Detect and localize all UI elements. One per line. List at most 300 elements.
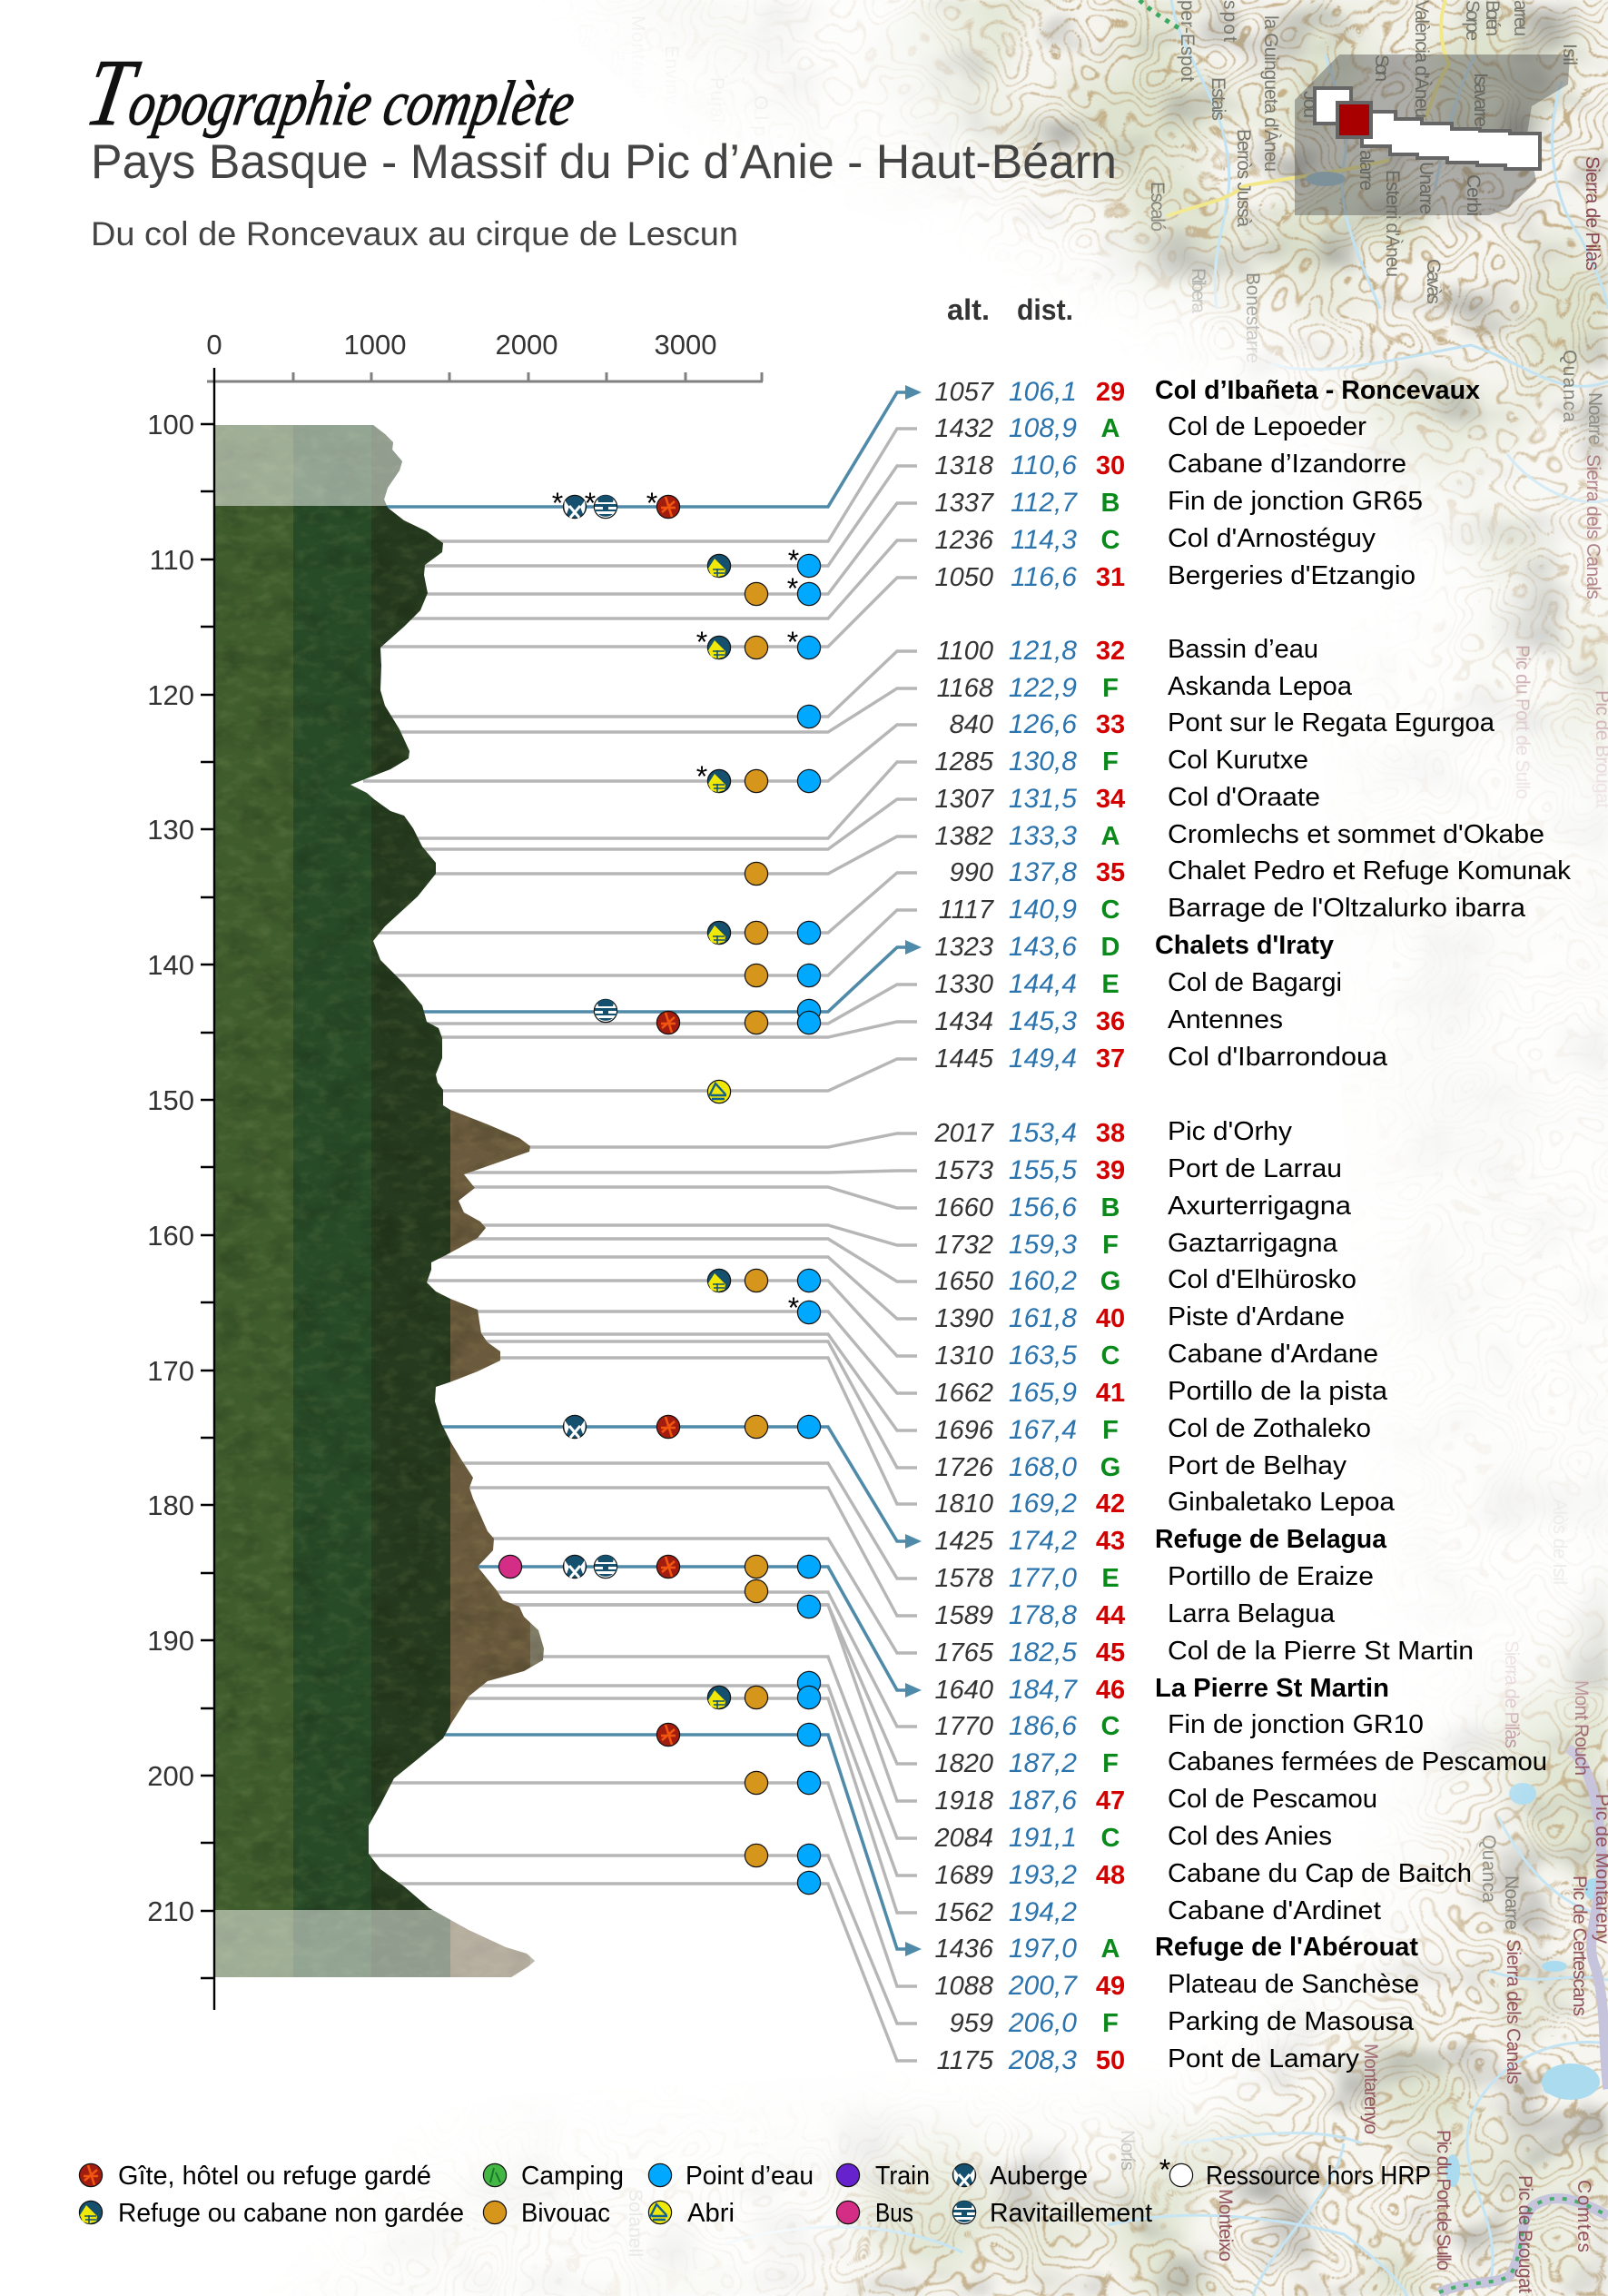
map place labels: Solanell (625, 2189, 646, 2257)
background: faded topographic map (323, 0, 1608, 2296)
map place labels: Pic de Certescans (1569, 1875, 1590, 2016)
row 42: 1810 (934, 1489, 993, 1519)
row A: 1436 (934, 1935, 994, 1964)
row A (934, 1933, 1418, 1964)
map place labels: Isil (1559, 44, 1580, 65)
row 45 (934, 1637, 1474, 1668)
row 45: 45 (1096, 1638, 1125, 1668)
row A (934, 412, 1366, 443)
row 30: Cabane d’Izandorre (1168, 450, 1406, 479)
off-route resource asterisks: * (696, 626, 707, 658)
row C (933, 1822, 1332, 1853)
map place labels: Son (1371, 54, 1392, 82)
legend: refuge: Refuge ou cabane non gardée (118, 2199, 464, 2228)
top altitude axis: 3000 (655, 329, 716, 361)
row F: F (1102, 1749, 1119, 1778)
row B: 156,6 (1009, 1193, 1077, 1222)
row Ardinet: 1562 (934, 1898, 993, 1927)
row 46: La Pierre St Martin (1155, 1674, 1389, 1703)
resource icons along the route (498, 495, 821, 1895)
row B: 1660 (934, 1193, 993, 1222)
row 36: 1434 (934, 1007, 993, 1036)
row F: F (1102, 747, 1119, 777)
map place labels: Mont Rouch (1571, 1680, 1592, 1776)
row D: D (1101, 933, 1120, 962)
row 35: Chalet Pedro et Refuge Komunak (1168, 856, 1572, 886)
row C: 2084 (933, 1824, 993, 1853)
row 50: Pont de Lamary (1168, 2044, 1360, 2073)
row 47: Col de Pescamou (1168, 1785, 1377, 1814)
row C (934, 1340, 1378, 1371)
off-route resource asterisks: * (788, 1292, 799, 1324)
row C: 1310 (934, 1341, 993, 1371)
row 33: 840 (950, 710, 993, 739)
row Ardinet: Cabane d'Ardinet (1168, 1896, 1381, 1925)
row F: 159,3 (1009, 1230, 1077, 1260)
row E: 1578 (934, 1564, 993, 1593)
row E: 1330 (934, 970, 993, 999)
row 29: 29 (1096, 378, 1125, 407)
row A: A (1101, 1935, 1120, 1964)
row 47: 187,6 (1009, 1786, 1077, 1816)
row B: 1337 (934, 489, 995, 518)
row C: Col d'Arnostéguy (1168, 524, 1376, 553)
map place labels: Pujal (706, 77, 727, 123)
row F: F (1102, 674, 1119, 703)
left distance axis: 140 (147, 949, 194, 981)
row 40: Piste d'Ardane (1168, 1302, 1345, 1331)
row 37: 37 (1096, 1044, 1125, 1074)
row 49: 1088 (934, 1972, 993, 2001)
row F: 959 (950, 2009, 993, 2038)
row C: Barrage de l'Oltzalurko ibarra (1168, 894, 1526, 923)
row 39: 155,5 (1009, 1155, 1077, 1185)
row C: C (1101, 896, 1120, 925)
row 36: 145,3 (1009, 1006, 1077, 1036)
row 42: 42 (1096, 1489, 1125, 1519)
row 36: 36 (1096, 1007, 1125, 1036)
legend: camping: Camping (521, 2162, 624, 2191)
row 44 (934, 1599, 1336, 1630)
row D (934, 931, 1334, 962)
row 36: Antennes (1168, 1005, 1283, 1034)
row 41: Portillo de la pista (1168, 1377, 1388, 1406)
row E: Portillo de Eraize (1168, 1562, 1374, 1591)
row 39 (934, 1154, 1342, 1185)
legend: abri (648, 2199, 735, 2228)
map place labels: Quanca (1559, 350, 1580, 422)
row G: G (1100, 1267, 1120, 1296)
row C: 1117 (939, 896, 995, 925)
map place labels: Isavarre (1470, 73, 1491, 127)
off-route resource asterisks: * (788, 544, 799, 577)
row 45: 1765 (934, 1638, 994, 1668)
left distance axis: 150 (147, 1084, 194, 1116)
row 34 (934, 783, 1320, 814)
row 49: Plateau de Sanchèse (1168, 1970, 1419, 1999)
row 29 (934, 376, 1480, 407)
row A: 133,3 (1009, 821, 1077, 851)
row F: F (1102, 2009, 1119, 2038)
row 38: 2017 (933, 1119, 995, 1148)
map place labels: spot (1219, 0, 1240, 42)
title: Topographie complète (79, 39, 586, 145)
row 47: 1918 (934, 1786, 993, 1816)
row 38: 153,4 (1009, 1118, 1077, 1148)
row C (939, 894, 1526, 925)
row 43 (934, 1525, 1387, 1556)
row F (934, 1747, 1547, 1778)
row 40: 161,8 (1009, 1303, 1077, 1333)
row 39: Port de Larrau (1168, 1154, 1342, 1183)
row 38 (933, 1117, 1293, 1148)
row C: C (1101, 526, 1120, 555)
map place labels: Noarre (1501, 1875, 1522, 1930)
row G: 168,0 (1009, 1452, 1077, 1482)
off-route resource asterisks: * (646, 487, 657, 520)
map place labels: Sierra de Pilàs (1582, 156, 1603, 271)
row A: 108,9 (1009, 413, 1077, 443)
row F: Parking de Masousa (1168, 2007, 1415, 2036)
row A (934, 820, 1544, 851)
row 44: Larra Belagua (1168, 1599, 1336, 1628)
legend: point d'eau: Point d’eau (686, 2162, 814, 2191)
row B (934, 487, 1423, 518)
row F: 130,8 (1009, 747, 1077, 777)
row Ardinet: 194,2 (1009, 1897, 1077, 1927)
row 32: 32 (1096, 637, 1125, 666)
row 48 (934, 1859, 1472, 1890)
row F: F (1102, 1231, 1119, 1260)
row 32 (937, 635, 1318, 666)
waypoint table (933, 376, 1572, 2075)
row 31: 116,6 (1011, 562, 1077, 592)
map place labels: Jou (1299, 91, 1320, 118)
row 41 (934, 1377, 1388, 1408)
row C: 1236 (934, 526, 994, 555)
row B: Axurterrigagna (1168, 1192, 1352, 1221)
left distance axis: 170 (147, 1355, 194, 1387)
row E: Col de Bagargi (1168, 968, 1342, 997)
legend: ressource hors HRP: * (1159, 2153, 1170, 2186)
map place labels: Pic du Port de Sullo (1433, 2130, 1454, 2271)
row 35 (950, 856, 1572, 887)
map place labels: Noarre (1584, 392, 1605, 445)
row E: 177,0 (1009, 1563, 1077, 1593)
row C: Fin de jonction GR10 (1168, 1710, 1424, 1739)
top altitude axis (206, 329, 763, 381)
row 48: 1689 (934, 1861, 993, 1890)
map place labels: Gavàs (1423, 259, 1444, 304)
row 31: 31 (1096, 563, 1125, 592)
map place labels: Sierra dels Canals (1503, 1939, 1524, 2084)
row E: E (1101, 1564, 1120, 1593)
row F (937, 672, 1353, 703)
row 44: 178,8 (1009, 1600, 1077, 1630)
row F: 1168 (937, 674, 993, 703)
row C: 140,9 (1009, 895, 1077, 925)
map place labels: Sierra de Pilàs (1501, 1640, 1522, 1748)
row 48: 48 (1096, 1861, 1125, 1890)
map place labels: la Guingueta d'Àneu (1260, 15, 1281, 172)
row A: A (1101, 414, 1120, 443)
row 40: 1390 (934, 1304, 993, 1333)
row 46: 46 (1096, 1676, 1125, 1705)
row 40 (934, 1302, 1345, 1333)
map place labels: Norís (1117, 2130, 1138, 2171)
map place labels: Comtes (1573, 2180, 1594, 2252)
row 32: 121,8 (1009, 636, 1077, 666)
legend: ressource hors HRP (1159, 2153, 1431, 2191)
row 39: 39 (1096, 1156, 1125, 1185)
map place labels: Esterri d'Àneu (1382, 170, 1403, 277)
row 47: 47 (1096, 1786, 1125, 1816)
row A: Cromlechs et sommet d'Okabe (1168, 820, 1544, 849)
row 49: 200,7 (1008, 1971, 1078, 2001)
legend: train (836, 2162, 930, 2191)
inset locator map (1295, 54, 1570, 215)
row D: Chalets d'Iraty (1155, 931, 1334, 960)
left distance axis: 120 (147, 679, 194, 711)
row F: 187,2 (1009, 1748, 1077, 1778)
legend: abri: Abri (687, 2199, 735, 2228)
row 34: Col d'Oraate (1168, 783, 1320, 812)
row B: B (1101, 489, 1120, 518)
legend: bus (836, 2199, 913, 2228)
row F: Gaztarrigagna (1168, 1229, 1338, 1258)
left distance axis: 190 (147, 1625, 194, 1657)
row 38: Pic d'Orhy (1168, 1117, 1293, 1146)
row 30: 110,6 (1011, 450, 1077, 480)
row 41: 41 (1096, 1379, 1125, 1408)
map place labels: Escaló (1147, 182, 1168, 232)
row 43: 174,2 (1009, 1526, 1077, 1556)
row 44: 1589 (934, 1601, 993, 1630)
map place labels: Unarre (1416, 162, 1436, 214)
row F: 122,9 (1009, 673, 1077, 703)
row 42: Ginbaletako Lepoa (1168, 1488, 1396, 1517)
row C: 114,3 (1011, 525, 1077, 555)
row 43: Refuge de Belagua (1155, 1525, 1387, 1554)
row E: E (1101, 970, 1120, 999)
map place labels: Escós (575, 23, 596, 73)
map place labels: Alòs de Isil (1549, 1499, 1570, 1585)
left distance axis (147, 368, 214, 2010)
row 29: 1057 (934, 378, 995, 407)
row E (934, 968, 1342, 999)
row 41: 165,9 (1009, 1378, 1077, 1408)
row 33: 33 (1096, 710, 1125, 739)
row 46 (934, 1674, 1389, 1705)
row F: 167,4 (1009, 1415, 1077, 1445)
row G: G (1100, 1453, 1120, 1482)
row C (934, 524, 1376, 555)
row 45: 182,5 (1009, 1638, 1077, 1668)
map place labels: Borén (1482, 0, 1503, 36)
row C: 163,5 (1009, 1341, 1077, 1371)
row C: C (1101, 1712, 1120, 1741)
row G: Port de Belhay (1168, 1451, 1347, 1480)
map place labels: Sorpe (1462, 0, 1483, 41)
row G: Col d'Elhürosko (1168, 1265, 1356, 1294)
row F: 1820 (934, 1749, 993, 1778)
row 35: 35 (1096, 858, 1125, 887)
map place labels: València d'Àneu (1411, 0, 1432, 118)
row C: 191,1 (1009, 1823, 1077, 1853)
row A: Col de Lepoeder (1168, 412, 1366, 441)
row 37: 149,4 (1009, 1044, 1077, 1074)
row G: 1726 (934, 1453, 994, 1482)
column headers alt. dist.: dist. (1017, 293, 1073, 326)
row G: 1650 (934, 1267, 993, 1296)
row F (934, 746, 1308, 777)
row B (934, 1192, 1352, 1222)
column headers alt. dist.: alt. (947, 293, 990, 326)
legend (79, 2153, 1431, 2228)
row 43: 1425 (934, 1527, 994, 1556)
row 37: Col d'Ibarrondoua (1168, 1043, 1388, 1072)
off-route resource asterisks: * (787, 626, 798, 658)
row C: 1770 (934, 1712, 993, 1741)
off-route resource asterisks: * (552, 487, 563, 520)
map place labels: per-Espot (1177, 0, 1198, 82)
off-route resource asterisks (552, 487, 799, 1324)
map place labels: arreu (1510, 0, 1531, 36)
left distance axis: 160 (147, 1220, 194, 1252)
row 46: 184,7 (1009, 1675, 1078, 1705)
off-route resource asterisks: * (787, 572, 798, 605)
row 34: 131,5 (1009, 784, 1077, 814)
row F: Col de Zothaleko (1168, 1414, 1371, 1443)
row D: 143,6 (1009, 932, 1077, 962)
top altitude axis: 2000 (496, 329, 557, 361)
row A: 1432 (934, 414, 993, 443)
legend: ravitaillement: Ravitaillement (990, 2199, 1152, 2228)
row 46: 1640 (934, 1676, 993, 1705)
row 41: 1662 (934, 1379, 993, 1408)
row 39: 1573 (934, 1156, 993, 1185)
row C: C (1101, 1341, 1120, 1371)
off-route resource asterisks: * (696, 760, 707, 793)
row 50 (937, 2044, 1360, 2075)
row 35: 990 (950, 858, 993, 887)
map place labels (507, 0, 1608, 2293)
subtitle: massif: Pays Basque - Massif du Pic d’Anie - Haut-Béarn (91, 135, 1117, 189)
map place labels: Arcalis (507, 0, 528, 54)
row F (934, 1229, 1338, 1260)
left distance axis: 180 (147, 1489, 194, 1521)
row F: Col Kurutxe (1168, 746, 1308, 775)
map place labels: Berròs Jussà (1233, 129, 1254, 227)
elevation profile (214, 418, 567, 1989)
row F (934, 1414, 1371, 1445)
row C: Cabane d'Ardane (1168, 1340, 1378, 1369)
map place labels: Sierra dels Canals (1583, 454, 1603, 599)
left distance axis: 110 (150, 544, 194, 576)
row 37: 1445 (934, 1044, 994, 1074)
legend: gîte: Gîte, hôtel ou refuge gardé (118, 2162, 431, 2191)
map place labels: Estais (1208, 77, 1228, 121)
row C: 186,6 (1009, 1711, 1077, 1741)
row A: Refuge de l'Abérouat (1155, 1933, 1418, 1962)
row 33: 126,6 (1009, 709, 1077, 739)
map place labels: Estach (607, 50, 627, 109)
row C: C (1101, 1824, 1120, 1853)
legend: ressource hors HRP: Ressource hors HRP (1206, 2162, 1431, 2191)
row A: A (1101, 822, 1120, 851)
row 44: 44 (1096, 1601, 1125, 1630)
map place labels: Ribera (1188, 268, 1208, 313)
top altitude axis: 1000 (344, 329, 406, 361)
row Ardinet (934, 1896, 1381, 1927)
row F: Cabanes fermées de Pescamou (1168, 1747, 1547, 1776)
row C: Col des Anies (1168, 1822, 1332, 1851)
left distance axis: 210 (147, 1895, 194, 1927)
row 34: 34 (1096, 785, 1125, 814)
row 50: 208,3 (1008, 2045, 1077, 2075)
row G: 160,2 (1009, 1266, 1077, 1296)
row 30: 1318 (934, 451, 993, 480)
map place labels: Monteixo (1215, 2189, 1236, 2261)
column headers alt. dist. (947, 293, 1073, 326)
row 42 (934, 1488, 1396, 1519)
row 48: 193,2 (1009, 1860, 1077, 1890)
row 42: 169,2 (1009, 1489, 1077, 1519)
map place labels: Olp (750, 95, 771, 136)
row 40: 40 (1096, 1304, 1125, 1333)
row 35: 137,8 (1009, 857, 1077, 887)
row B: Fin de jonction GR65 (1168, 487, 1423, 516)
row F (950, 2007, 1415, 2038)
row 45: Col de la Pierre St Martin (1168, 1637, 1474, 1666)
map place labels: Montardit (627, 15, 648, 100)
row F: 1696 (934, 1416, 994, 1445)
map place labels: Enviny (661, 45, 682, 105)
legend: auberge: Auberge (990, 2162, 1088, 2191)
row F: 1285 (934, 747, 994, 777)
row 32: Bassin d’eau (1168, 635, 1318, 664)
left distance axis: 130 (147, 814, 194, 846)
map place labels: Quanca (1478, 1835, 1499, 1903)
map place labels: alarre (1356, 150, 1376, 191)
map place labels: Bonestarre (1242, 272, 1263, 363)
row 34: 1307 (934, 785, 995, 814)
row G (934, 1451, 1347, 1482)
connector lines (363, 429, 917, 2061)
row B: 112,7 (1011, 488, 1078, 518)
legend: bivouac (483, 2199, 610, 2228)
row 31: 1050 (934, 563, 993, 592)
row E: 144,4 (1009, 969, 1077, 999)
legend: bus: Bus (875, 2199, 913, 2228)
row E (934, 1562, 1374, 1593)
row 38: 38 (1096, 1119, 1125, 1148)
row 30: 30 (1096, 451, 1125, 480)
row 36 (934, 1005, 1283, 1036)
row 33: Pont sur le Regata Egurgoa (1168, 708, 1495, 737)
row F: 206,0 (1008, 2008, 1077, 2038)
map place labels: Pic de Brougat (1514, 2175, 1535, 2293)
row 50: 50 (1096, 2046, 1125, 2075)
row C (934, 1710, 1424, 1741)
row B: B (1101, 1193, 1120, 1222)
legend: train: Train (875, 2162, 930, 2191)
subtitle: route: Du col de Roncevaux au cirque de Lescun (91, 215, 738, 252)
row 29: 106,1 (1009, 377, 1077, 407)
legend: bivouac: Bivouac (521, 2199, 610, 2228)
row F: 1732 (934, 1231, 993, 1260)
row 29: Col d’Ibañeta - Roncevaux (1155, 376, 1480, 405)
